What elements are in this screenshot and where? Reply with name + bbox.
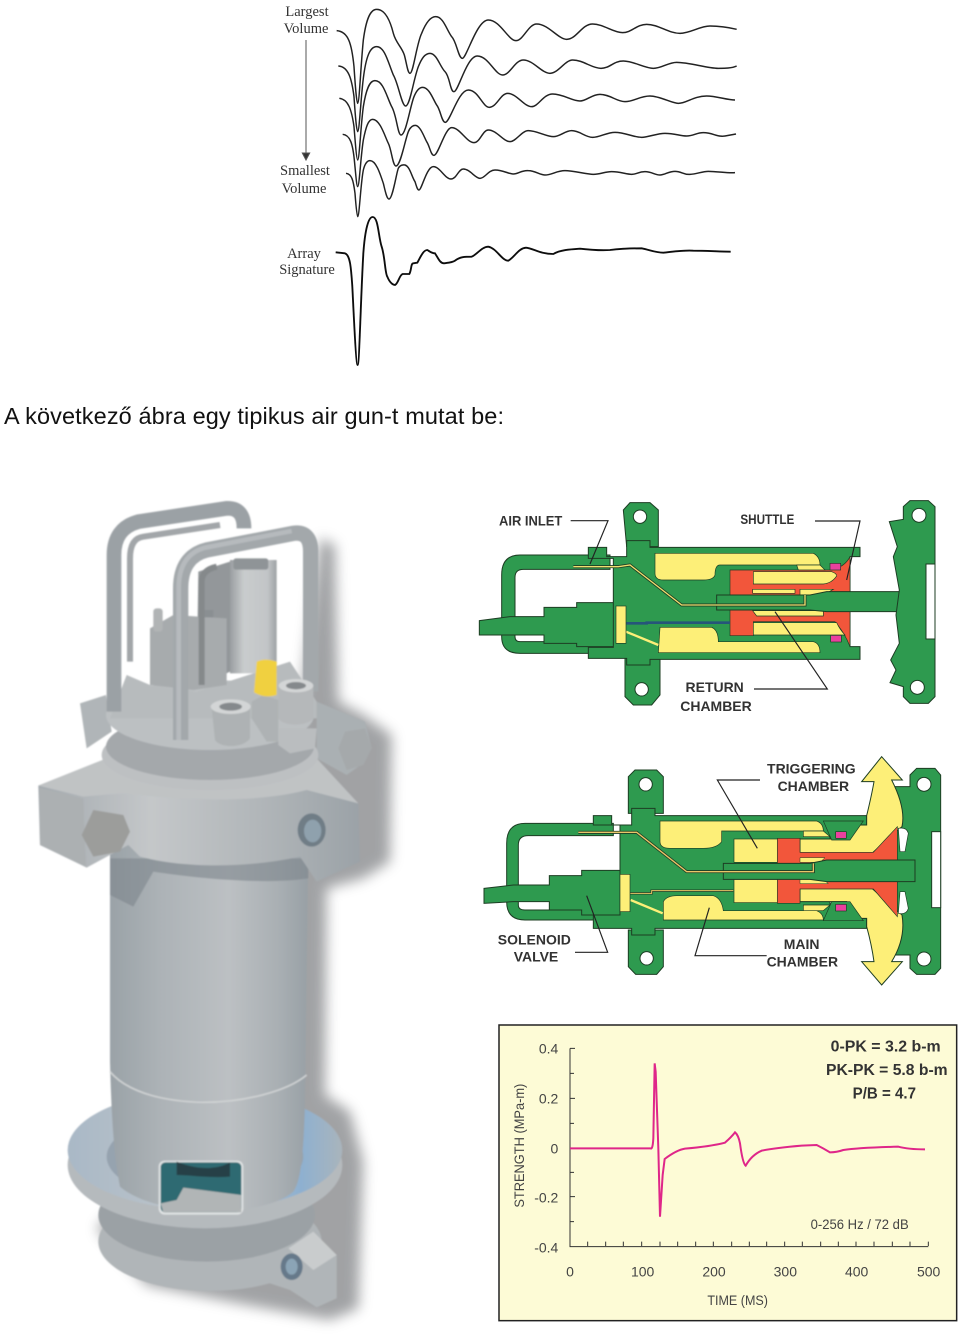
solenoid yellow — [616, 606, 626, 643]
y axis labels: 0.2 — [539, 1090, 559, 1106]
signature curve — [570, 1063, 925, 1217]
white gaps at muzzle — [898, 828, 908, 914]
plate details — [910, 508, 935, 694]
x axis title: TIME (MS) — [707, 1292, 768, 1308]
air blast arrows — [800, 757, 903, 985]
stats: P/B = 4.7 — [853, 1085, 916, 1102]
housing — [593, 808, 867, 935]
solenoid and air loop — [479, 555, 617, 653]
clamp shadow on cylinder — [110, 858, 308, 907]
cylinder body — [110, 842, 308, 1211]
y axis labels — [534, 1040, 559, 1255]
panel: source signature chart — [499, 1025, 957, 1321]
x axis labels: 400 — [845, 1263, 869, 1279]
housing — [588, 541, 860, 665]
label: triggering chamber: TRIGGERING — [767, 761, 856, 777]
pink seals — [836, 832, 846, 911]
shuttle — [777, 827, 897, 917]
rear handle — [114, 508, 244, 712]
diagram: closed air gun — [479, 501, 935, 714]
labels: array signature: Array — [287, 246, 322, 262]
exhaust port — [159, 1161, 243, 1215]
base flange — [68, 1090, 342, 1291]
label: air inlet: AIR INLET — [499, 512, 563, 528]
right plate — [893, 768, 941, 974]
waveform traces — [337, 9, 737, 217]
x axis labels: 0 — [566, 1263, 574, 1279]
side bolt hole — [298, 813, 326, 847]
pink seals — [830, 563, 841, 642]
label: solenoid valve: VALVE — [514, 949, 558, 965]
stats: 0-PK = 3.2 b-m — [831, 1039, 941, 1056]
y axis labels: 0 — [551, 1140, 559, 1156]
leader lines — [575, 780, 767, 956]
mounting holes — [633, 510, 648, 696]
central rod — [717, 592, 910, 612]
y axis title: STRENGTH (MPa-m) — [511, 1084, 527, 1208]
x axis labels — [566, 1263, 941, 1279]
return chamber — [753, 565, 845, 635]
x axis labels: 200 — [702, 1263, 726, 1279]
caption: A következő ábra egy tipikus air gun-t mutat be: — [4, 403, 504, 429]
mounting holes — [639, 778, 653, 965]
lug with bolt hole — [263, 1232, 337, 1307]
plate details — [917, 777, 941, 966]
label: return chamber: RETURN — [686, 679, 744, 695]
x axis labels: 100 — [631, 1263, 655, 1279]
x axis labels: 300 — [774, 1263, 797, 1279]
chart background — [499, 1025, 957, 1321]
air passages — [573, 565, 805, 645]
left lug — [623, 503, 660, 705]
y axis labels: -0.4 — [534, 1239, 559, 1255]
drop shadow — [97, 538, 392, 1320]
label: return chamber: CHAMBER — [680, 698, 752, 714]
x axis labels: 500 — [917, 1263, 941, 1279]
front handle — [181, 533, 311, 740]
right plate — [889, 501, 935, 703]
trigger chambers — [734, 831, 830, 911]
bandwidth note: 0-256 Hz / 72 dB — [811, 1216, 909, 1232]
top plate — [106, 662, 317, 750]
labels: smallest volume: Smallest — [280, 163, 330, 179]
leader lines — [571, 521, 860, 689]
main chamber lower — [658, 627, 820, 653]
y axis labels: -0.2 — [534, 1189, 559, 1205]
array signature trace — [336, 217, 731, 365]
seal blocks — [823, 821, 863, 921]
solenoid and air loop — [484, 823, 622, 920]
photo: air gun — [38, 508, 392, 1320]
label: shuttle: SHUTTLE — [740, 511, 794, 527]
fittings — [211, 679, 317, 753]
arrow: largest to smallest — [302, 40, 310, 160]
solenoid block — [150, 558, 277, 690]
icon: yellow cap — [254, 660, 277, 696]
yellow gap in shuttle — [800, 858, 828, 884]
label: main chamber: CHAMBER — [767, 954, 838, 970]
clamp ring — [38, 713, 360, 882]
solenoid yellow — [620, 874, 630, 912]
main chamber upper — [660, 821, 823, 848]
y axis labels: 0.4 — [539, 1040, 559, 1056]
diagram: firing air gun — [484, 757, 941, 985]
label: main chamber: MAIN — [784, 936, 820, 952]
bolt left — [82, 810, 130, 857]
axes and ticks — [570, 1048, 928, 1247]
stats — [826, 1039, 948, 1102]
left lug — [628, 770, 663, 974]
label: triggering chamber: CHAMBER — [778, 778, 849, 794]
stats: PK-PK = 5.8 b-m — [826, 1062, 948, 1079]
bolt right — [338, 728, 372, 770]
label: solenoid valve: SOLENOID — [498, 931, 571, 947]
back clamp arms — [80, 695, 112, 748]
labels: smallest volume: Volume — [282, 181, 326, 197]
labels: largest volume: Volume — [284, 21, 328, 37]
air passages — [578, 832, 813, 913]
central rod — [723, 860, 915, 882]
labels: largest volume: Largest — [285, 4, 329, 20]
main chamber upper — [655, 553, 820, 580]
main chamber lower — [663, 896, 823, 920]
panel: volume waveforms — [279, 4, 737, 365]
labels: array signature: Signature — [279, 262, 335, 278]
shuttle — [730, 557, 850, 647]
